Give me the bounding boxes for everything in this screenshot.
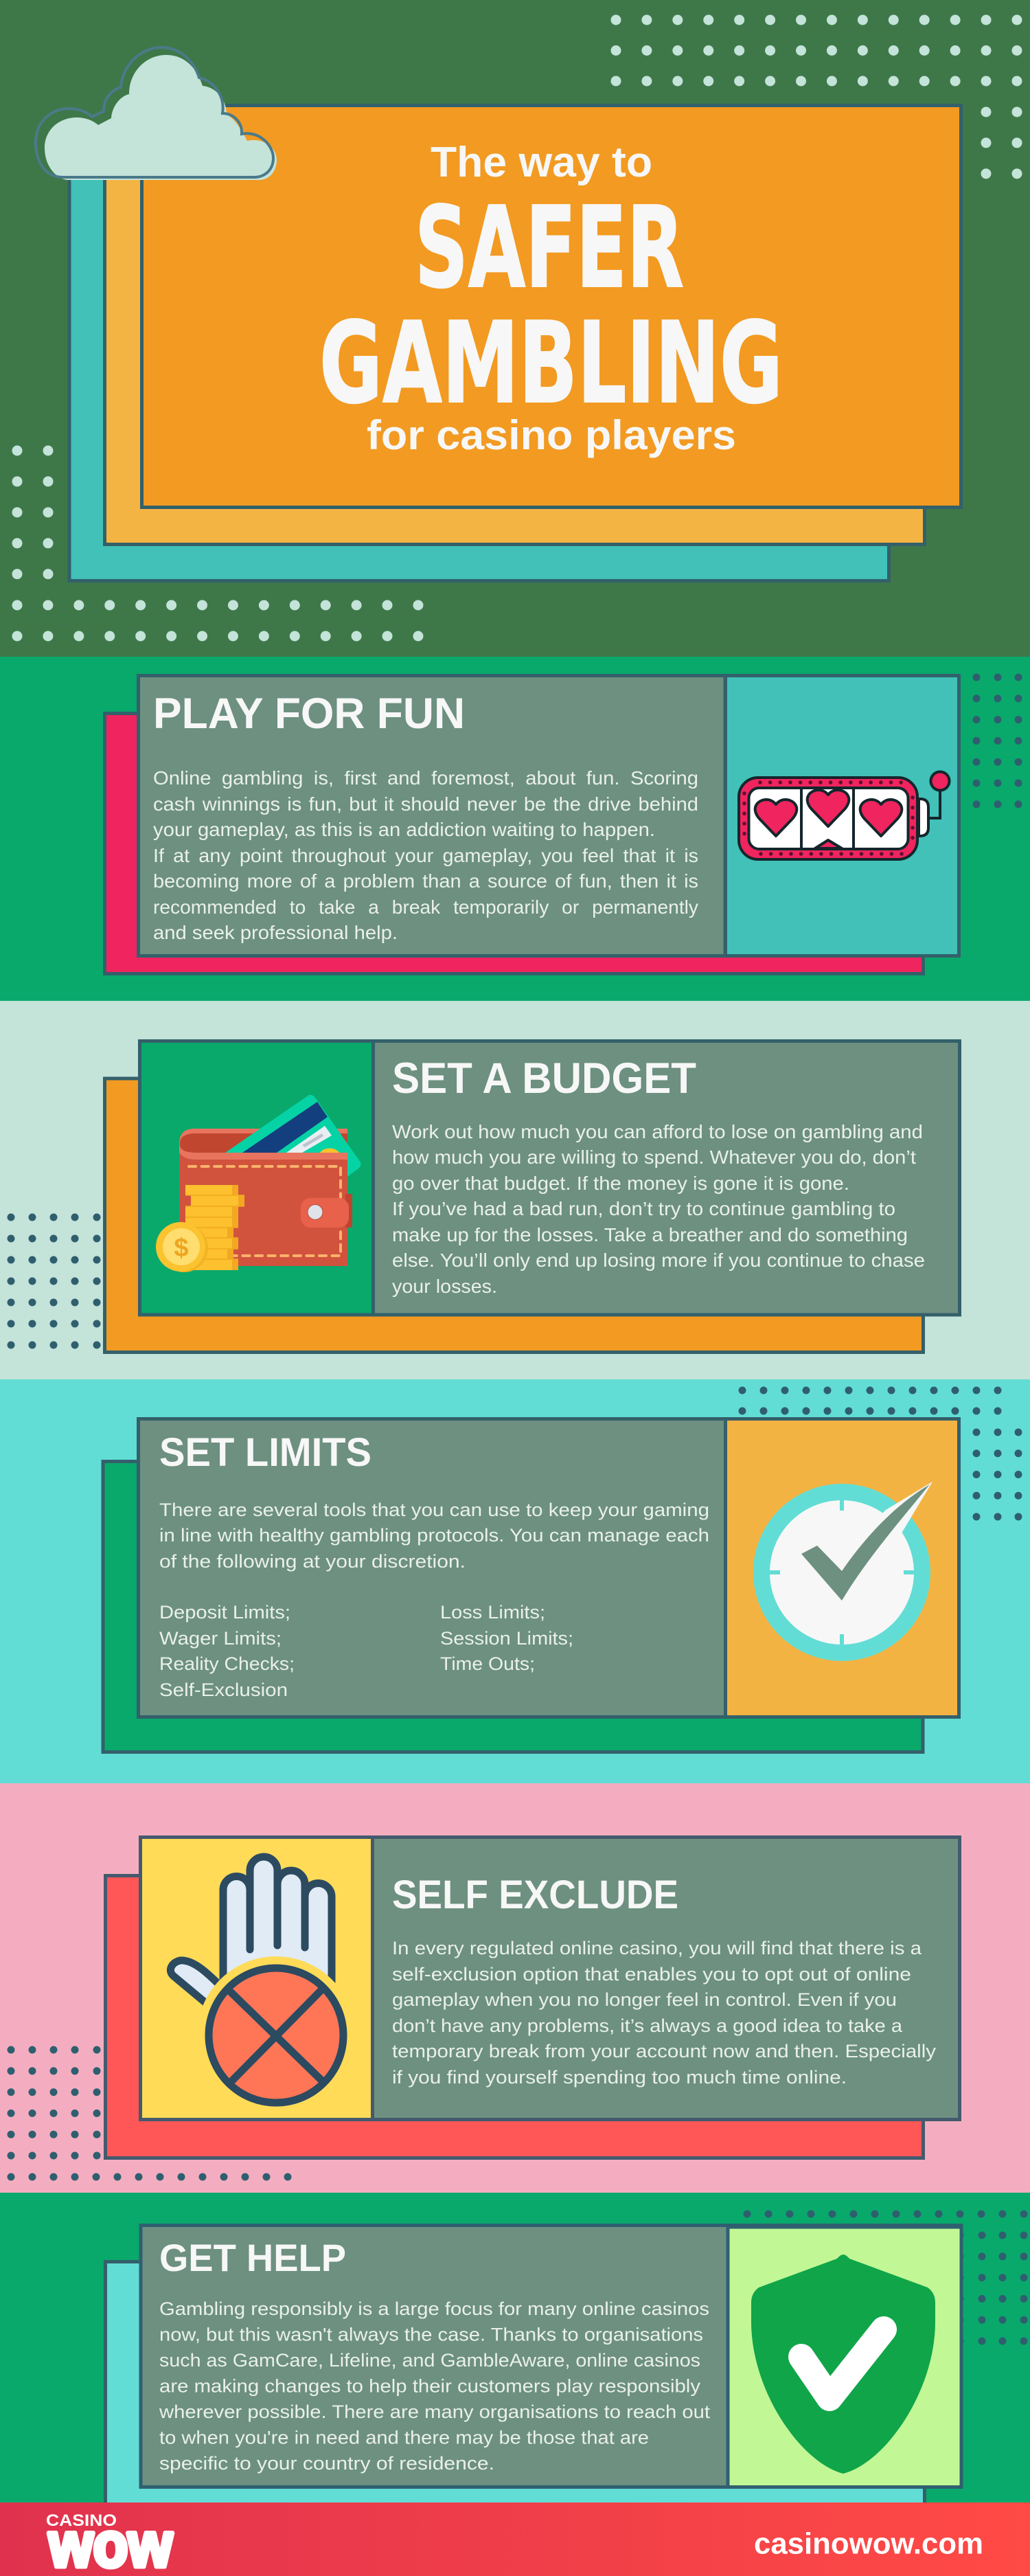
top border band — [728, 2224, 963, 2228]
body text — [392, 1121, 925, 1297]
heading: SET A BUDGET — [392, 1054, 696, 1103]
heading: PLAY FOR FUN — [153, 690, 465, 738]
body text: go over that budget. If the money is gone it is gone. — [392, 1173, 849, 1194]
body text: Work out how much you can afford to lose on gambling and — [392, 1121, 923, 1142]
body text: recommended to take a break temporarily or permanently — [153, 896, 698, 918]
green icon card — [140, 1041, 374, 1315]
header dot pattern bottom left — [17, 451, 418, 636]
list: limits column one — [159, 1602, 295, 1700]
body text: make up for the losses. Take a breather and do something — [392, 1224, 908, 1245]
text card — [139, 676, 725, 956]
dots: set limits — [742, 1390, 1019, 1517]
body text: cash winnings is fun, but it should never be the drive behind — [153, 793, 698, 815]
list: limits column two: Loss Limits; — [440, 1602, 545, 1623]
dots: get help — [747, 2214, 1025, 2341]
panel: set limits — [103, 1419, 959, 1752]
body text: gameplay when you no longer feel in control. Even if you — [392, 1989, 897, 2010]
icon: wallet with coins — [156, 1095, 361, 1272]
body text: of the following at your discretion. — [159, 1551, 466, 1572]
text card — [139, 1419, 725, 1717]
panel: set a budget — [104, 1041, 960, 1352]
icon: shield with check mark — [751, 2255, 935, 2474]
list: limits column one: Wager Limits; — [159, 1628, 282, 1649]
list: limits column one: Self-Exclusion — [159, 1680, 288, 1700]
list: limits column two — [440, 1602, 573, 1674]
list: limits column one: Reality Checks; — [159, 1653, 295, 1674]
body text: temporary break from your account now and then. Especially — [392, 2041, 937, 2061]
logo word: CASINO: CASINO — [46, 2511, 117, 2530]
dots: self exclude — [11, 2050, 288, 2177]
icon: wallet with coins: $ — [174, 1234, 189, 1263]
body text: if you find yourself spending too much time online. — [392, 2067, 847, 2088]
list: limits column one: Deposit Limits; — [159, 1602, 290, 1623]
section: set limits background — [0, 1379, 1030, 1783]
icon: slot machine — [739, 772, 949, 859]
body text — [159, 1500, 709, 1572]
heading: SET LIMITS — [159, 1430, 371, 1475]
panel: get help — [106, 2224, 963, 2522]
body text: Gambling responsibly is a large focus for many online casinos — [159, 2298, 709, 2319]
dots: set a budget — [11, 1217, 97, 1345]
body text — [159, 2298, 711, 2474]
teal icon card — [725, 676, 959, 956]
title line: GAMBLING: GAMBLING — [319, 299, 783, 429]
body text: specific to your country of residence. — [159, 2453, 494, 2474]
title — [319, 139, 783, 458]
body text: such as GamCare, Lifeline, and GambleAware, online casinos — [159, 2350, 700, 2371]
body text: There are several tools that you can use to keep your gaming — [159, 1500, 709, 1520]
teal back card — [69, 158, 889, 581]
body text: to when you're in need and there may be those that are — [159, 2428, 649, 2448]
body text: and seek professional help. — [153, 922, 398, 943]
dots: play for fun — [976, 677, 1018, 805]
body text: your losses. — [392, 1276, 497, 1297]
heading: SELF EXCLUDE — [392, 1873, 678, 1917]
list: limits column two: Session Limits; — [440, 1628, 573, 1649]
section: set a budget background — [0, 1001, 1030, 1379]
logo — [46, 2510, 172, 2576]
yellow middle card — [104, 137, 924, 544]
header dot pattern top right — [616, 20, 1018, 205]
heading: GET HELP — [159, 2236, 346, 2279]
website url: casinowow.com — [754, 2527, 983, 2561]
title line: SAFER: SAFER — [415, 183, 684, 313]
orange front card — [141, 106, 961, 507]
panel: play for fun — [104, 676, 959, 974]
panel: self exclude — [106, 1837, 960, 2158]
yellow icon card — [140, 1837, 372, 2120]
body text: don’t have any problems, it’s always a good idea to take a — [392, 2015, 903, 2036]
body text: If at any point throughout your gameplay, you feel that it is — [153, 845, 698, 866]
section: get help background — [0, 2193, 1030, 2502]
body text: how much you are willing to spend. Whatever you do, don’t — [392, 1146, 916, 1168]
body text: In every regulated online casino, you will find that there is a — [392, 1938, 922, 1958]
body text: wherever possible. There are many organisations to reach out — [159, 2402, 711, 2422]
section: self exclude background — [0, 1783, 1030, 2193]
body text: else. You’ll only end up losing more if you continue to chase — [392, 1250, 925, 1271]
green shadow card — [103, 1462, 923, 1752]
text card — [141, 2226, 728, 2487]
body text: becoming more of a problem than a source of fun, then it is — [153, 870, 698, 892]
cyan shadow card — [106, 2261, 924, 2522]
icon: raised hand with cross button — [170, 1857, 355, 2114]
title line: The way to: The way to — [431, 139, 652, 186]
yellow icon card — [725, 1419, 959, 1717]
body text: Online gambling is, first and foremost, about fun. Scoring — [153, 767, 698, 789]
body text — [392, 1938, 937, 2088]
body text: in line with healthy gambling protocols. You can manage each — [159, 1525, 709, 1546]
section: header background — [0, 0, 1030, 657]
lime icon card — [728, 2226, 961, 2487]
list: limits column two: Time Outs; — [440, 1653, 535, 1674]
text card — [372, 1837, 960, 2120]
body text: your gameplay, as this is an addiction waiting to happen. — [153, 819, 655, 840]
footer bar — [0, 2502, 1030, 2576]
body text: now, but this wasn't always the case. Thanks to organisations — [159, 2325, 703, 2345]
body text — [153, 767, 698, 943]
red shadow card — [106, 1875, 923, 2158]
orange shadow card — [104, 1078, 923, 1352]
section: play for fun background — [0, 657, 1030, 1001]
title line: for casino players: for casino players — [367, 412, 736, 458]
title card stack — [69, 106, 961, 581]
icon: cloud — [36, 47, 277, 180]
icon: clock with check mark — [753, 1482, 932, 1661]
pink shadow card — [104, 713, 923, 974]
body text: are making changes to help their customers play responsibly — [159, 2375, 701, 2396]
body text: self-exclusion option that enables you to opt out of online — [392, 1964, 911, 1985]
text card — [374, 1041, 960, 1315]
body text: If you’ve had a bad run, don’t try to continue gambling to — [392, 1198, 895, 1219]
